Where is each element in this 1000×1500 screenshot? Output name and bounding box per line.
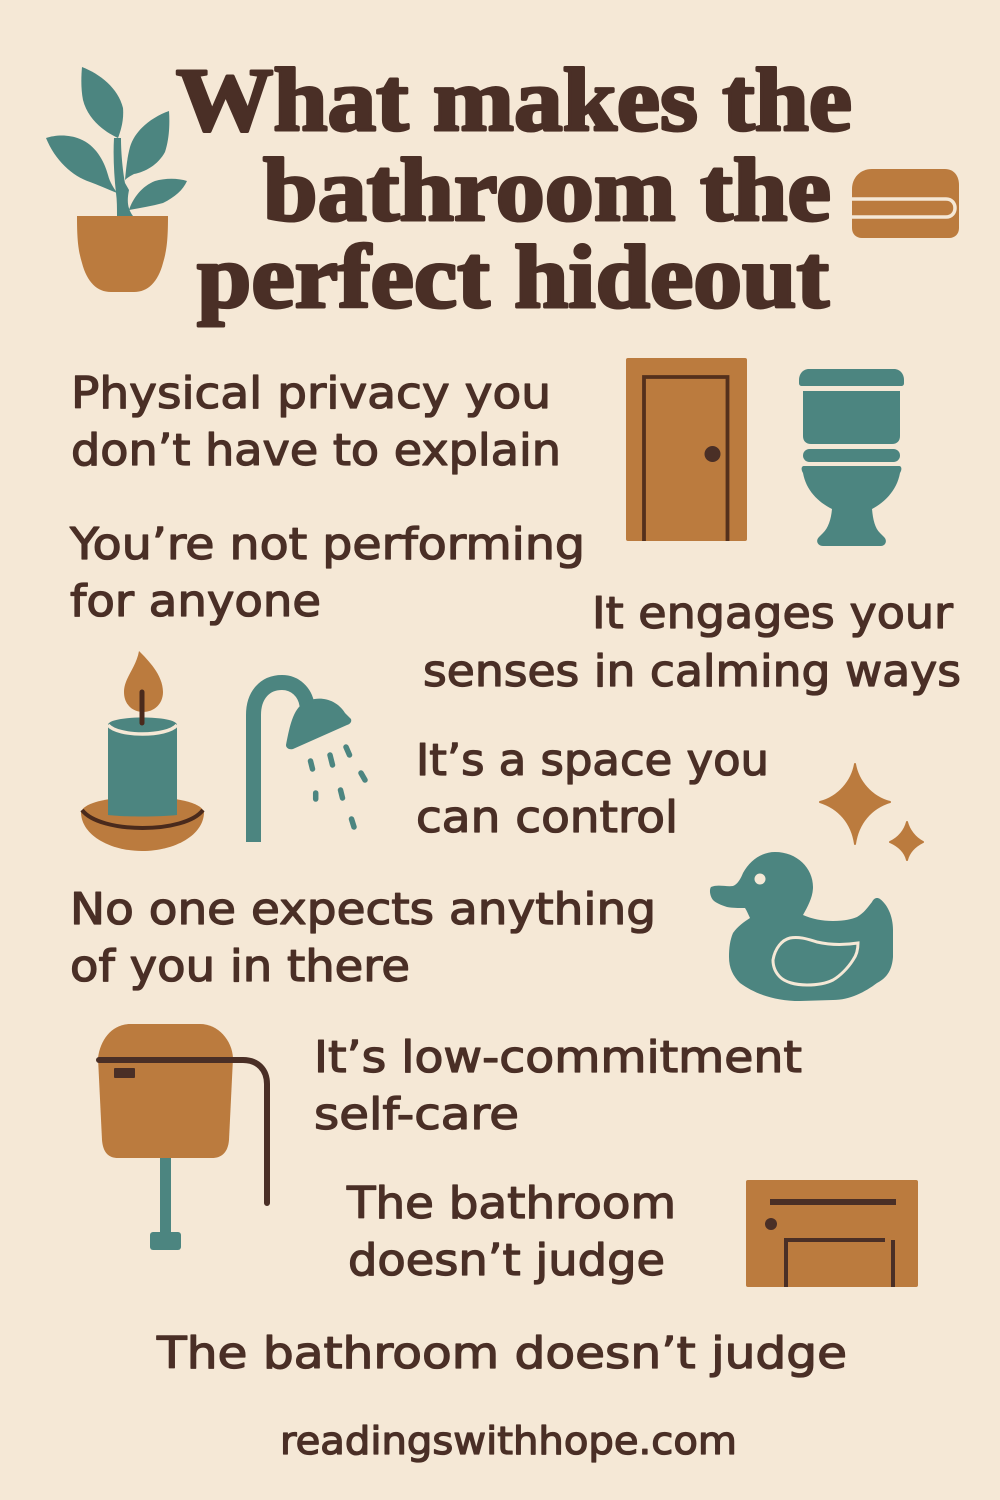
title: What makes the [176,51,852,150]
text: engages senses: senses in calming ways [423,646,961,697]
icon: toilet [799,369,904,546]
text: physical privacy: don’t have to explain [71,425,561,476]
icon: door [626,358,747,541]
text: not performing [69,519,585,627]
text: physical privacy [71,368,561,476]
title: perfect hideout [197,228,829,327]
text: space you control: It’s a space you [416,735,769,786]
text: no one expects: No one expects anything [70,884,656,935]
icon: candle [81,651,204,851]
text: not performing: You’re not performing [69,519,585,570]
text: space you control [416,735,769,843]
icon: cabinet [746,1180,918,1287]
text: engages senses [423,588,961,697]
text: low commitment: It’s low-commitment [314,1032,802,1083]
text: low commitment [314,1032,802,1140]
title: bathroom the [263,141,831,240]
icon: folded towel [851,169,959,238]
text: physical privacy: Physical privacy you [71,368,551,419]
text: no one expects: of you in there [70,941,410,992]
text: bathroom doesn't judge [346,1178,676,1286]
text: engages senses: It engages your [592,588,954,639]
text: not performing: for anyone [70,576,321,627]
text: no one expects [70,884,656,992]
text: low commitment: self-care [314,1089,519,1140]
icon: toilet tank [98,1024,267,1250]
icon: rubber duck [710,852,893,1001]
icon: potted plant [46,67,187,292]
text: website: readingswithhope.com [280,1419,737,1463]
icon: sparkles [820,764,923,860]
text: space you control: can control [416,792,678,843]
icon: shower [254,682,365,842]
text: closing line: The bathroom doesn’t judge [156,1328,847,1379]
text: bathroom doesn't judge: doesn’t judge [348,1235,665,1286]
text: bathroom doesn't judge: The bathroom [346,1178,676,1229]
title [176,51,852,327]
